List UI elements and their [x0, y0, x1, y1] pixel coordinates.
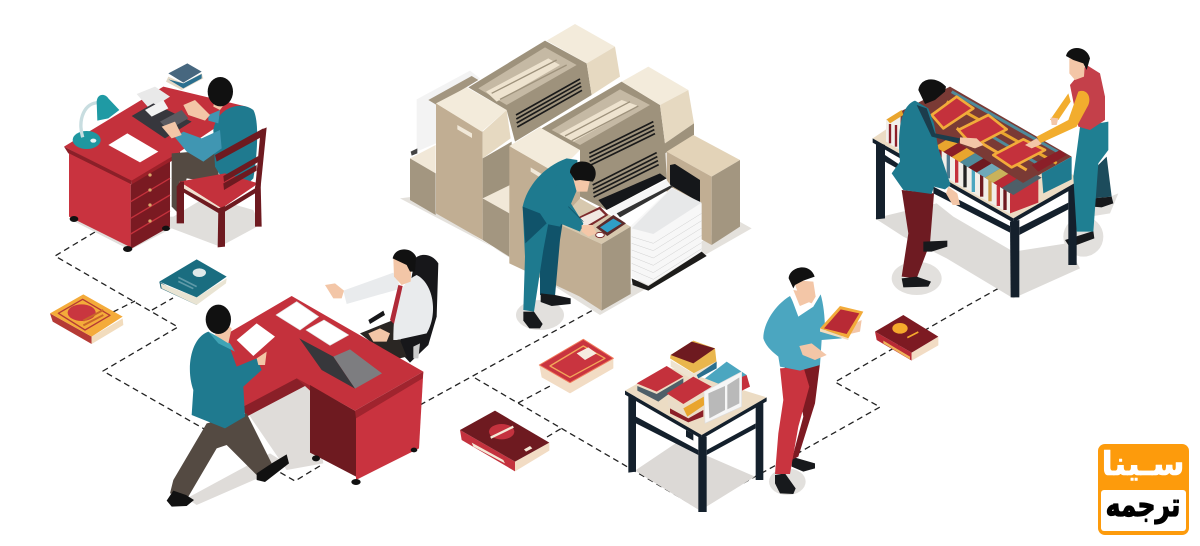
icon: teal book [159, 259, 227, 305]
desk floor shadow [243, 383, 323, 470]
panel: writer at typewriter desk [64, 63, 267, 252]
manager [325, 249, 433, 360]
operator [516, 158, 597, 330]
book stack [166, 63, 203, 90]
logo badge [1098, 444, 1189, 535]
panel: book selection table with reader [460, 267, 938, 512]
typewriter [132, 87, 192, 138]
paper sheet [108, 133, 158, 162]
walker shadow [187, 453, 288, 505]
panel: printing press with operator [400, 24, 752, 330]
icon: maroon book [875, 315, 938, 361]
back worker legs [1065, 157, 1113, 245]
documents on desk [276, 302, 349, 345]
small table [625, 367, 767, 512]
front worker [892, 79, 983, 287]
table floor shadow [635, 443, 755, 511]
low feeder box [410, 145, 436, 215]
logo lower word: ترجمه [1106, 486, 1180, 524]
back press unit [436, 24, 620, 257]
panel: book sorting table with two workers [873, 48, 1118, 298]
writing desk [64, 87, 247, 252]
back worker [1025, 48, 1108, 232]
rows of books [886, 87, 1072, 214]
output paper stack [607, 180, 707, 291]
manager chair [368, 255, 438, 363]
icon: dark red book [460, 411, 549, 471]
front row book tops [935, 138, 1025, 193]
reader [763, 267, 863, 495]
desk floor shadow [68, 197, 260, 250]
floor shadow [875, 203, 1080, 298]
book stacks [637, 341, 750, 422]
open red books on top [932, 97, 1045, 167]
desk lamp [73, 95, 119, 149]
writer [162, 77, 257, 213]
dashed workflow connector lines [55, 232, 1067, 508]
laptop [299, 338, 382, 389]
front press unit [509, 67, 694, 297]
icon: orange book [50, 294, 123, 344]
back paper stack [417, 71, 480, 152]
open book [704, 372, 742, 423]
walking editor [167, 305, 289, 507]
wooden chair [177, 127, 267, 247]
delivery box [667, 135, 740, 245]
L-shaped desk [225, 296, 423, 485]
panel: editor and manager at L-shaped desk [167, 249, 438, 507]
logo upper word: سـینا [1101, 444, 1185, 483]
long table [873, 87, 1080, 297]
press floor shadow [400, 197, 752, 315]
book held by reader [820, 306, 863, 340]
icon: red book [539, 339, 613, 393]
control console [555, 198, 631, 311]
